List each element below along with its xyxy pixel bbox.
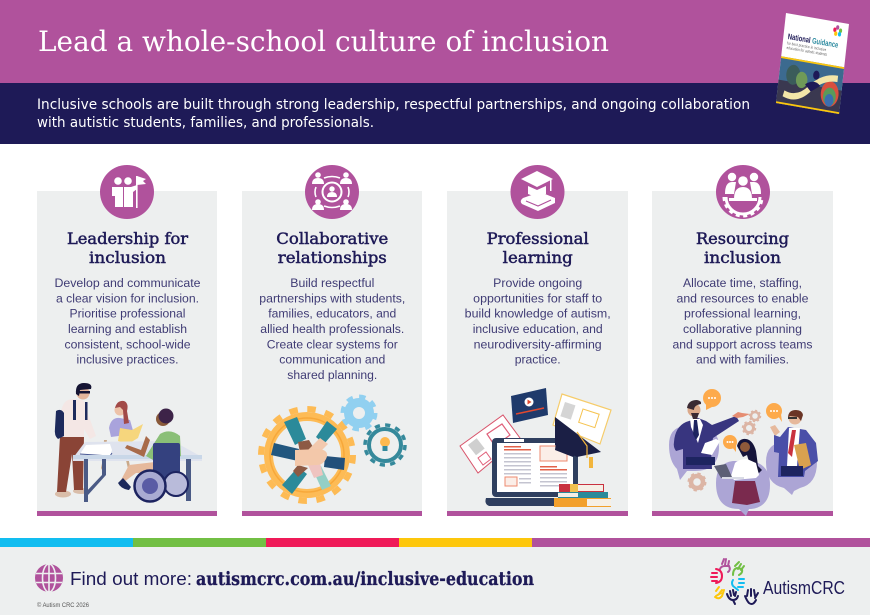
heading: inclusion [89, 248, 166, 267]
body text: and resources to enable [676, 291, 809, 305]
report cover: National Guidance [787, 33, 839, 50]
body text: partnerships with students, [259, 291, 405, 305]
illustration: laptop, books and cap [460, 388, 611, 507]
intro band [0, 83, 870, 144]
icon: globe [35, 564, 63, 592]
colour stripe [0, 538, 870, 547]
illustration: students at table [55, 383, 202, 502]
body text: practice. [515, 353, 561, 367]
heading: inclusion [704, 248, 781, 267]
panel: resourcing inclusion [652, 165, 833, 516]
intro text: with autistic students, families, and professionals. [37, 114, 374, 131]
body text: and with families. [696, 353, 789, 367]
logo wordmark: AutismCRC [763, 578, 845, 598]
copyright: © Autism CRC 2026 [37, 602, 90, 609]
illustration: gears and joined hands [261, 396, 405, 501]
body text: Prioritise professional [70, 307, 186, 321]
body text: neurodiversity-affirming [474, 337, 602, 351]
heading: Professional [487, 229, 589, 248]
icon: connected people [312, 172, 352, 210]
illustration: colleagues talking [669, 389, 818, 516]
call to action: autismcrc.com.au/inclusive-education [196, 569, 534, 590]
logo: Autism CRC [711, 559, 845, 604]
body text: families, educators, and [268, 307, 396, 321]
body text: collaborative planning [683, 322, 802, 336]
report cover: education for autistic students [786, 45, 827, 57]
header band [0, 0, 870, 83]
icon: team and gear [724, 173, 762, 216]
report cover [776, 13, 849, 114]
body text: a clear vision for inclusion. [56, 291, 199, 305]
heading: Resourcing [696, 229, 789, 248]
report cover: for best practice in inclusive [787, 41, 826, 52]
call to action: Find out more: [70, 568, 192, 589]
panel: collaborative relationships [242, 165, 422, 516]
icon: people with flag [112, 176, 146, 208]
body text: and support across teams [672, 337, 812, 351]
heading: Leadership for [67, 229, 188, 248]
title: Lead a whole-school culture of inclusion [38, 25, 609, 58]
panel: leadership for inclusion [37, 165, 217, 516]
body text: consistent, school-wide [64, 337, 191, 351]
body text: opportunities for staff to [473, 291, 602, 305]
body text: inclusive education, and [473, 322, 603, 336]
heading: relationships [278, 248, 387, 267]
footer [0, 547, 870, 615]
body text: allied health professionals. [260, 322, 404, 336]
heading: Collaborative [276, 229, 388, 248]
heading: learning [503, 248, 573, 267]
body text: Provide ongoing [493, 276, 582, 290]
body text: professional learning, [684, 307, 801, 321]
body text: Allocate time, staffing, [683, 276, 802, 290]
body text: communication and [279, 353, 385, 367]
body text: inclusive practices. [76, 353, 178, 367]
body text: learning and establish [68, 322, 187, 336]
body text: shared planning. [287, 368, 377, 382]
body text: Develop and communicate [54, 276, 201, 290]
body text: Build respectful [290, 276, 374, 290]
icon: graduation cap on book [521, 171, 555, 211]
body text: Create clear systems for [267, 337, 398, 351]
body text: build knowledge of autism, [465, 307, 611, 321]
intro text: Inclusive schools are built through strong leadership, respectful partnerships, and ongoing collaboration [37, 96, 750, 113]
panel: professional learning [447, 165, 628, 516]
